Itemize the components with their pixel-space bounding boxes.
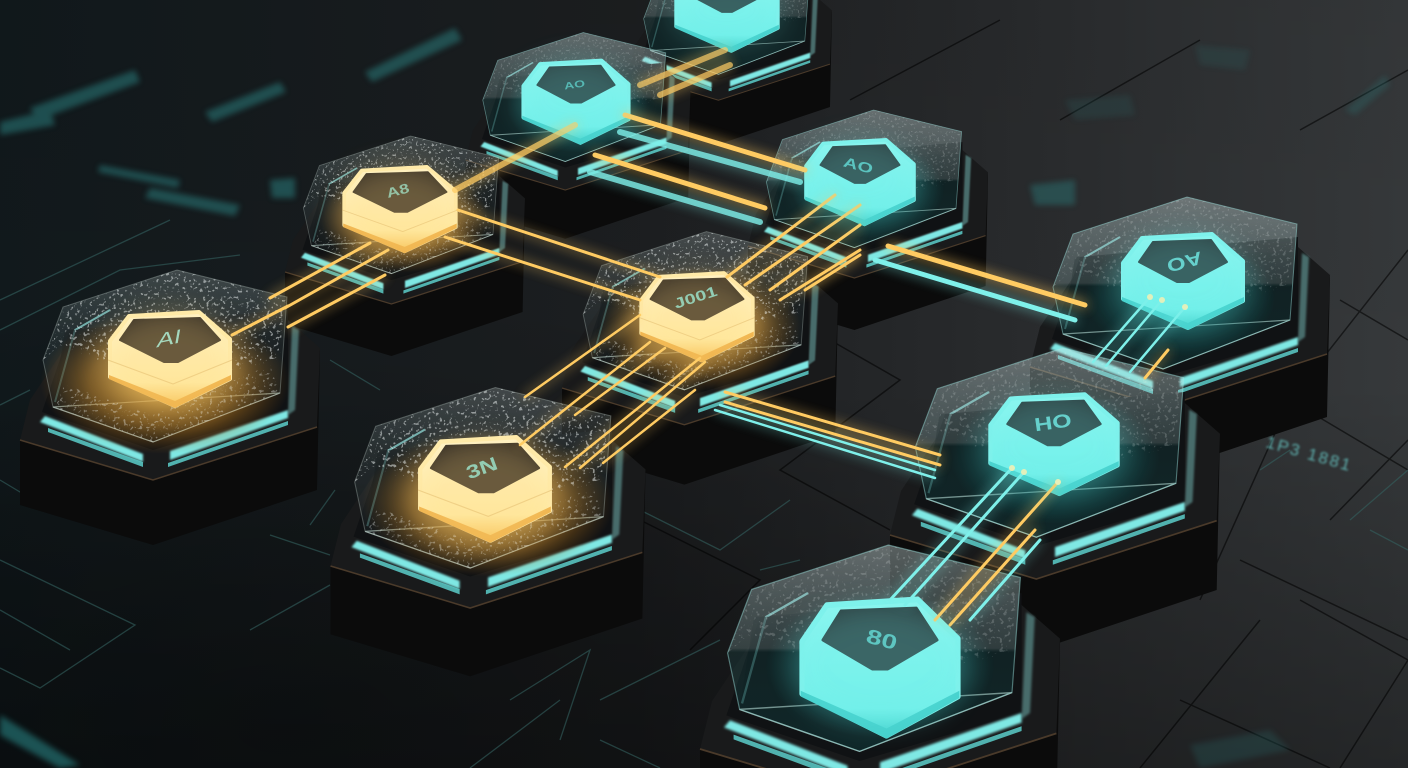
- warm and cyan connection beams: [232, 50, 1188, 625]
- chip label: OH: [1033, 409, 1073, 435]
- chip label: AO: [842, 154, 875, 177]
- chip label: 3N: [463, 453, 500, 483]
- chip label: A8: [385, 181, 411, 201]
- chip label: J001: [672, 282, 719, 312]
- chip label: 80: [864, 625, 900, 655]
- node: AI warm chip: [20, 270, 320, 545]
- node: upper cyan chip: [466, 32, 690, 239]
- chip label: AO: [1165, 247, 1204, 275]
- chip label: AO: [563, 78, 586, 92]
- chip glow halos: [100, 0, 1251, 725]
- node: far right cyan chip: [1030, 197, 1330, 472]
- board marking text: 1P3 1881: [1264, 433, 1354, 475]
- node: right lower cyan chip: [890, 348, 1220, 650]
- node: central warm chip: [562, 232, 838, 485]
- beam emitter dots: [1009, 294, 1188, 485]
- chip label: AI: AI: [155, 325, 183, 352]
- node: upper right cyan chip: [748, 110, 988, 330]
- node: top center cyan chip: [628, 0, 832, 144]
- node: bottom cyan chip: [700, 545, 1060, 768]
- node: warm chip upper left: [285, 136, 525, 356]
- node: lower warm chip: [330, 388, 646, 676]
